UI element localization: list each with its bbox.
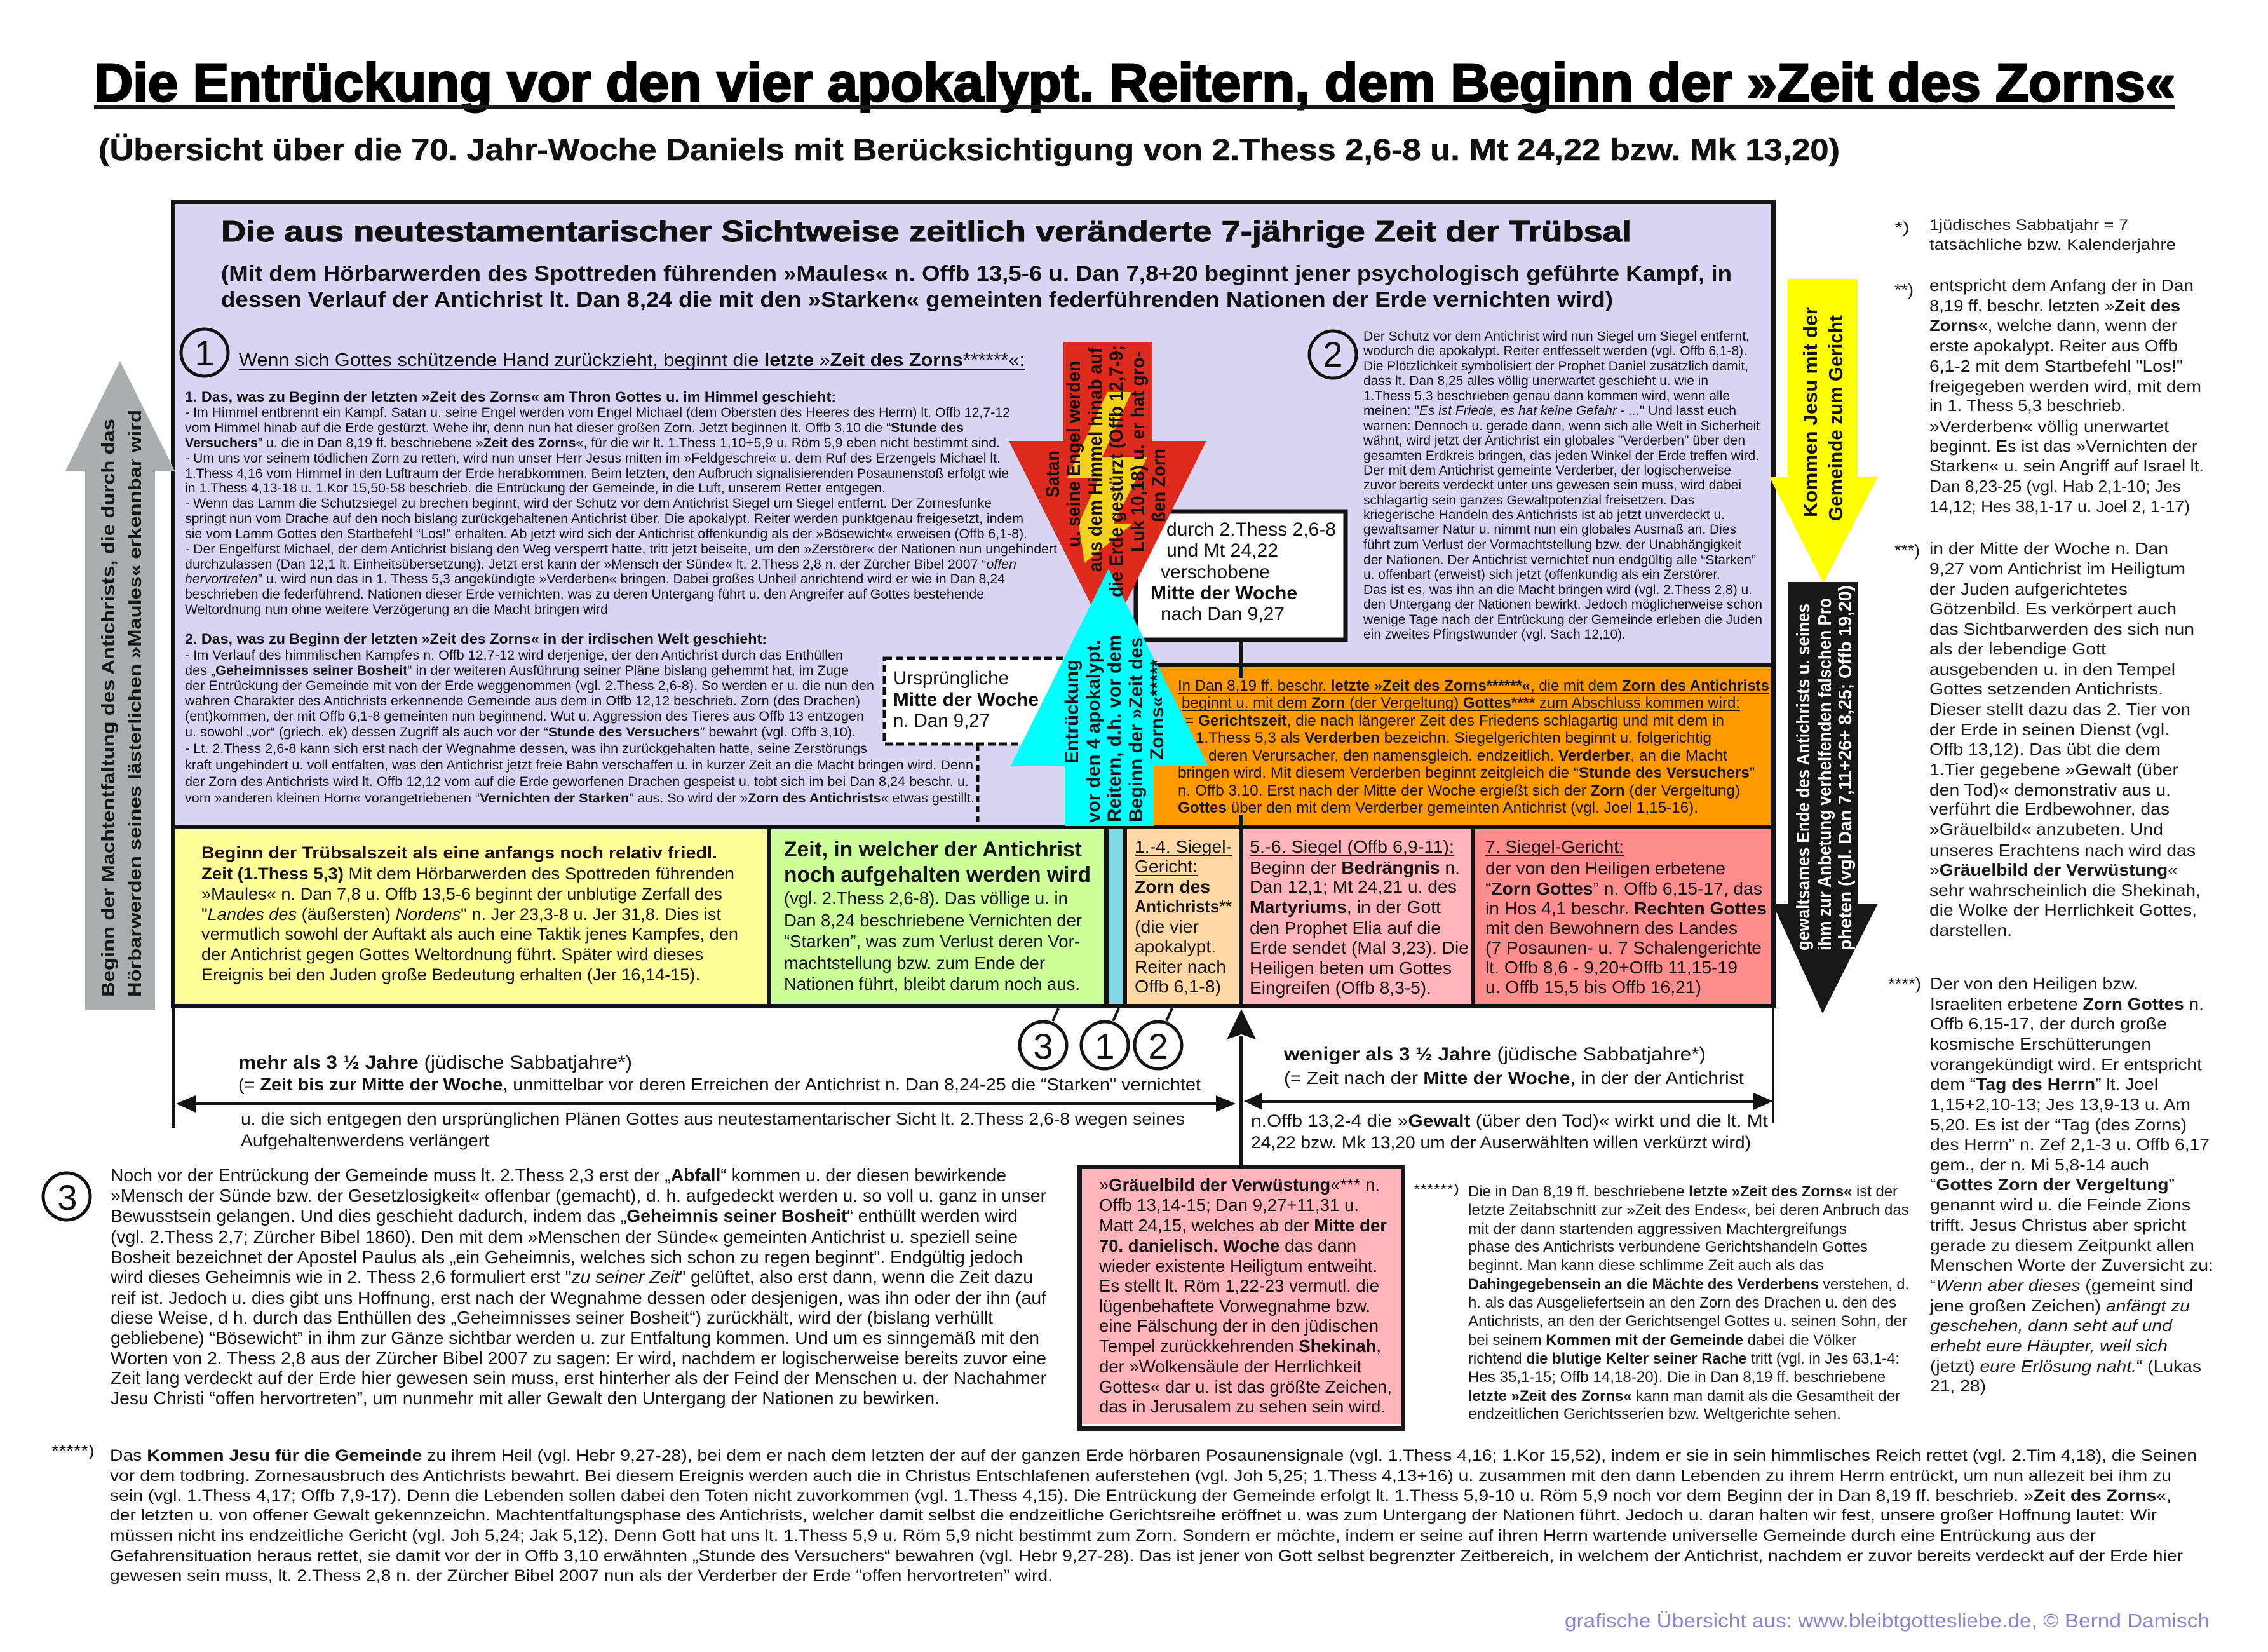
text block: section 1 heaven <box>185 389 1057 617</box>
footnote: five asterisks: Gefahrensituation heraus rettet, sie damit vor der in Offb 3,10 erwähnten „Stunde des Versuchers“ bewahren (vgl. Hebr 9,27-28). Das ist jener von Gott selbst begrenzter Zeitbereich, in welchem der Antichrist, nachdem er zuvor bereits verdeckt auf der Erde hier <box>110 1547 2183 1565</box>
text block: section 1 heaven: durchzulassen (Dan 12,1 lt. Einheitsübersetzung). Jetzt erst kann der »Mensch der Sünde« lt. 2.Thess 2,8 n. der Zürcher Bibel 2007 “ offen <box>185 557 1016 572</box>
footnote: five asterisks: müssen nicht ins endzeitliche Gericht (vgl. Joh 5,24; Jak 5,12). Denn Gott hat uns lt. 1.Thess 5,9 u. Röm 5,9 nicht bestimmt zum Zorn. Sondern er möchte, indem er seine auf ihren Herrn wartende universelle Gemeinde durch eine Entrückung aus der <box>110 1527 2096 1545</box>
text block: protection removed seal by seal: wodurch die apokalypt. Reiter entfesselt werden (vgl. Offb 6,1-8). <box>1363 344 1747 358</box>
footnote: three asterisks: 9,27 vom Antichrist im Heiligtum <box>1929 559 2185 578</box>
arrow: red downward Satan arrow with lightning bolt <box>1009 342 1206 639</box>
panel: abomination of desolation: »Gräuelbild der Verwüstung«*** n. <box>1099 1175 1380 1195</box>
footnote: four asterisks: gem., der n. Mi 5,8-14 auch <box>1930 1155 2149 1174</box>
panel: abomination of desolation: der »Wolkensäule der Herrlichkeit <box>1099 1357 1361 1376</box>
footnote: three asterisks: als der lebendige Gott <box>1929 639 2107 658</box>
text block: section 2 earth: (ent)kommen, der mit Offb 6,1-8 gemeinten nun beginnend. Wut u. Aggression des Tieres aus Offb 13 entzogen <box>185 709 864 724</box>
callout: original middle of the week: Mitte der Woche <box>893 689 1039 710</box>
panel: peach seals 1-4: 1.-4. Siegel- <box>1135 837 1232 856</box>
panel: abomination of desolation: eine Fälschung der in den jüdischen <box>1099 1316 1379 1336</box>
panel: pink seals 5-6: Eingreifen (Offb 8,3-5). <box>1250 978 1431 998</box>
panel: pink seals 5-6: 5.-6. Siegel (Offb 6,9-11): <box>1250 837 1454 856</box>
icon: number 3 circle <box>43 1173 90 1220</box>
text block: section 2 earth: - Lt. 2.Thess 2,6-8 kann sich erst nach der Wegnahme dessen, was ihn zurückgehalten hatte, seine Zerstörungs <box>185 741 867 756</box>
text block: section 1 heaven: - Im Himmel entbrennt ein Kampf. Satan u. seine Engel werden vom Engel Michael (dem Obersten des Heeres des Herrn) lt. Offb 12,7-12 <box>185 405 1010 420</box>
footnote: three asterisks: die Wolke der Herrlichkeit Gottes, <box>1929 900 2197 919</box>
text block: section 1 heaven: - Wenn das Lamm die Schutzsiegel zu brechen beginnt, wird der Schutz vor dem Antichrist Siegel um Siegel entfernt. Der Zornesfunke <box>185 496 992 511</box>
footnote: four asterisks: geschehen, dann seht auf und <box>1930 1316 2173 1335</box>
text block: section 1 heaven: sie vom Lamm Gottes den Startbefehl “Los!” erhalten. Ab jetzt wird sich der Antichrist offenkundig als der »Bösewicht« erweisen (Offb 6,1-8). <box>185 527 1027 541</box>
callout: original middle of the week: Ursprüngliche <box>893 668 1009 689</box>
panel: salmon seventh seal <box>1475 829 1771 1004</box>
panel: pink seals 5-6: Martyriums, in der Gott <box>1250 897 1441 917</box>
text block: protection removed seal by seal: warnen: Dennoch u. gerade dann, wenn sich alle Welt in Sicherheit <box>1363 419 1760 433</box>
footnote: two asterisks <box>1894 276 2204 516</box>
text block: apostasy and man of sin: Bosheit bezeichnet der Apostel Paulus als „ein Geheimnis, welches sich schon zu regen beginnt". Endgültig jedoch <box>111 1247 1023 1267</box>
panel: abomination of desolation: Es stellt lt. Röm 1,22-23 vermutl. die <box>1099 1276 1379 1296</box>
timeline: less than 3 1/2 years: (= Zeit nach der Mitte der Woche , in der der Antichrist <box>1284 1068 1744 1088</box>
text block: section 2 earth: u. sowohl „vor“ (griech. ek) dessen Zugriff als auch vor der “ Stunde des Versuchers ” bewahrt (vgl. Offb 3,10). <box>185 725 856 740</box>
panel: abomination of desolation: 70. danielisch. Woche das dann <box>1099 1236 1356 1256</box>
arrow: gray upward unfolding of power <box>65 361 175 1010</box>
text: red arrow label <box>1043 345 1170 597</box>
footnote: five asterisks: sein (vgl. 1.Thess 4,17; Offb 7,9-17). Denn die Lebenden sollen dabei den Toten nicht zuvorkommen (vgl. 1.Thess 4,15). Die Entrückung der Gemeinde erfolgt lt. 1.Thess 5,9-10 u. Röm 5,9 noch vor dem Beginn der in Dan 8,19 ff. beschrieb. » Zeit des Zorns «, <box>110 1487 2171 1505</box>
panel: salmon seventh seal: in Hos 4,1 beschr. Rechten Gottes <box>1485 898 1767 918</box>
panel: peach seals 1-4: Antichrists** <box>1135 897 1232 916</box>
footnote: two asterisks: **) <box>1894 280 1914 299</box>
text block: protection removed seal by seal: Das ist es, was ihn an die Macht bringen wird (vgl. 2.Thess 2,8) u. <box>1363 583 1752 597</box>
footnote: three asterisks: in der Mitte der Woche n. Dan <box>1929 539 2168 558</box>
footnote: one asterisk: tatsächliche bzw. Kalenderjahre <box>1929 236 2176 254</box>
panel: peach seals 1-4: Offb 6,1-8) <box>1135 977 1221 996</box>
text: red arrow label: u. seine Engel werden <box>1063 361 1084 547</box>
footnote: three asterisks: ausgebenden u. in den Tempel <box>1929 660 2175 679</box>
panel: green restrained Antichrist: Dan 8,24 beschriebene Vernichten der <box>784 911 1082 930</box>
panel: yellow beginning of tribulation: der Antichrist gegen Gottes Weltordnung führt. Später wird dieses <box>201 945 703 964</box>
footnote: three asterisks: »Gräuelbild« anzubeten. Und <box>1929 820 2163 839</box>
panel: green restrained Antichrist: (vgl. 2.Thess 2,6-8). Das völlige u. in <box>784 888 1068 908</box>
footnote: three asterisks: den Tod)« demonstrativ aus u. <box>1929 780 2171 799</box>
footnote: four asterisks <box>1888 974 2213 1395</box>
panel: green restrained Antichrist: Zeit, in welcher der Antichrist <box>784 837 1082 862</box>
panel: peach seals 1-4: Reiter nach <box>1135 957 1226 977</box>
arrow: yellow downward coming of Jesus: Gemeinde zum Gericht <box>1825 315 1847 521</box>
footnote: four asterisks: Menschen Worte der Zuversicht zu: <box>1930 1256 2213 1275</box>
footnote: four asterisks: 1,15+2,10-13; Jes 13,9-13 u. Am <box>1930 1095 2190 1114</box>
text block: protection removed seal by seal: meinen: "Es ist Friede, es hat keine Gefahr - ..." Und lasst euch <box>1363 403 1736 418</box>
footnote: four asterisks: Der von den Heiligen bzw. <box>1930 974 2138 993</box>
footnote: six asterisks: bei seinem Kommen mit der Gemeinde dabei die Völker <box>1468 1332 1856 1349</box>
text block: protection removed seal by seal: schlagartig sein ganzes Gewaltpotenzial freisetzen. Das <box>1363 493 1694 508</box>
panel: yellow beginning of tribulation: Ereignis bei den Juden große Bedeutung erhalten (Jer 16,14-15). <box>201 965 700 984</box>
text block: protection removed seal by seal: wenige Tage nach der Entrückung der Gemeinde erleben die Juden <box>1363 613 1762 627</box>
arrow: gray upward unfolding of power: Beginn der Machtentfaltung des Antichrists, die durch das <box>98 419 119 997</box>
text block: protection removed seal by seal: Der Schutz vor dem Antichrist wird nun Siegel um Siegel entfernt, <box>1363 329 1750 344</box>
panel: pink seals 5-6: Heiligen beten um Gottes <box>1250 958 1452 978</box>
text block: section 1 heaven: in 1.Thess 4,13-18 u. 1.Kor 15,50-58 beschrieb. die Entrückung der Gemeinde, in die Luft, unserem Retter entgegen. <box>185 481 886 496</box>
text block: apostasy and man of sin: Noch vor der Entrückung der Gemeinde muss lt. 2.Thess 2,3 erst der „ Abfall“ kommen u. der diesen bewirkende <box>111 1165 1006 1185</box>
callout: postponed middle of the week: Mitte der Woche <box>1151 583 1297 604</box>
footnote: one asterisk: 1jüdisches Sabbatjahr = 7 <box>1929 217 2128 234</box>
footnote: two asterisks: in 1. Thess 5,3 beschrieb. <box>1929 396 2126 415</box>
text block: protection removed seal by seal: der Nationen. Der Antichrist vernichtet nun endgültig alle “Starken” <box>1363 553 1756 567</box>
timeline: less than 3 1/2 years: weniger als 3 ½ Jahre (jüdische Sabbatjahre*) <box>1283 1044 1706 1065</box>
title: Die Entrückung vor den vier apokalypt. Reitern, dem Beginn der »Zeit des Zorns« <box>94 53 2175 112</box>
panel heading: Die aus neutestamentarischer Sichtweise zeitlich veränderte 7-jährige Zeit der Trübsal <box>221 215 1631 248</box>
text: cyan arrow label: vor den 4 apokalypt. <box>1083 640 1104 823</box>
text block: section 2 earth: vom »anderen kleinen Horn« vorangetriebenen “ Vernichten der Starken ” aus. So wird der »Zorn des Antichrists « etwas gestillt. <box>185 791 975 806</box>
footnote: five asterisks: gewesen sein muss, lt. 2.Thess 2,8 n. der Zürcher Bibel 2007 nun als der Verderber der Erde “offen hervortreten” wird. <box>110 1567 1053 1585</box>
text block: section 2 earth: - Im Verlauf des himmlischen Kampfes n. Offb 12,7-12 wird derjenige, der den Antichrist durch das Enthüllen <box>185 648 843 663</box>
panel: peach seals 1-4: apokalypt. <box>1135 937 1216 956</box>
panel: yellow beginning of tribulation: »Maules« n. Dan 7,8 u. Offb 13,5-6 beginnt der unblutige Zerfall des <box>201 884 722 904</box>
timeline: less than 3 1/2 years: 24,22 bzw. Mk 13,20 um der Auserwählten willen verkürzt wird) <box>1251 1133 1751 1152</box>
text: cyan arrow label: Entrückung <box>1062 660 1083 764</box>
icon: circles 3 1 2 with leaders: 1 <box>1095 1026 1115 1066</box>
credit line: grafische Übersicht aus: www.bleibtgottesliebe.de, © Bernd Damisch <box>1565 1609 2210 1632</box>
text block: protection removed seal by seal: führt zum Verlust der Vormachtstellung bzw. der Unabhängigkeit <box>1363 538 1741 552</box>
text block: protection removed seal by seal: wähnt, wird jetzt der Antichrist ein globales "Verderben" über den <box>1363 433 1745 448</box>
footnote: six asterisks: h. als das Ausgeliefertsein an den Zorn des Drachen u. den des <box>1468 1294 1896 1311</box>
footnote: four asterisks: ****) <box>1888 974 1921 993</box>
footnote: three asterisks: Götzenbild. Es verkörpert auch <box>1929 599 2177 618</box>
footnote: six asterisks: letzte »Zeit des Zorns« kann man damit als die Gesamtheit der <box>1468 1388 1900 1405</box>
panel: yellow beginning of tribulation: "Landes des (äußersten) Nordens" n. Jer 23,3-8 u. Jer 31,8. Dies ist <box>201 905 721 924</box>
footnote: one asterisk <box>1894 217 2176 254</box>
panel: peach seals 1-4 <box>1127 829 1239 1004</box>
footnote: two asterisks: Dan 8,23-25 (vgl. Hab 2,1-10; Jes <box>1929 477 2181 496</box>
footnote: six asterisks: richtend die blutige Kelter seiner Rache tritt (vgl. in Jes 63,1-4: <box>1468 1350 1900 1367</box>
footnote: four asterisks: kosmische Erschütterungen <box>1930 1034 2151 1053</box>
footnote: four asterisks: Offb 6,15-17, der durch große <box>1930 1014 2167 1033</box>
panel: abomination of desolation: Gottes« dar u. ist das größte Zeichen, <box>1099 1377 1392 1397</box>
panel heading: dessen Verlauf der Antichrist lt. Dan 8,24 die mit den »Starken« gemeinten federführenden Nationen der Erde vernichten wird) <box>221 288 1613 312</box>
footnote: five asterisks <box>51 1442 2197 1585</box>
footnote: four asterisks: 5,20. Es ist der “Tag (des Zorns) <box>1930 1115 2187 1134</box>
panel: abomination of desolation: Offb 13,14-15; Dan 9,27+11,31 u. <box>1099 1195 1359 1215</box>
footnote: two asterisks: 6,1-2 mit dem Startbefehl "Los!" <box>1929 356 2183 376</box>
panel: orange judgment time <box>1112 663 1771 826</box>
text block: apostasy and man of sin: Zeit lang verdeckt auf der Erde hier gewesen sein muss, erst hinterher als der Feind der Menschen u. der Nachahmer <box>111 1368 1046 1388</box>
text: cyan arrow label: Zorns«***** <box>1147 660 1168 760</box>
text block: apostasy and man of sin: gebliebene) “Bösewicht” in ihm zur Gänze sichtbar werden u. zur Entfaltung kommen. Und um es sinngemäß mit den <box>111 1328 1039 1348</box>
footnote: two asterisks: 14,12; Hes 38,1-17 u. Joel 2, 1-17) <box>1929 497 2190 516</box>
footnote: four asterisks: des Herrn” n. Zef 2,1-3 u. Offb 6,17 <box>1930 1135 2210 1154</box>
timeline: more than 3 1/2 years <box>172 1008 1236 1150</box>
text block: protection removed seal by seal: Der mit dem Antichrist gemeinte Verderber, der logischerweise <box>1363 463 1731 478</box>
footnote: three asterisks: Dieser stellt dazu das 2. Tier von <box>1929 700 2190 719</box>
panel: teal strip <box>1109 829 1123 1004</box>
text: red arrow label: Satan <box>1043 450 1063 498</box>
arrow: black downward end of Antichrist: gewaltsames Ende des Antichrists u. seines <box>1793 604 1814 951</box>
panel: orange judgment time: In Dan 8,19 ff. beschr. letzte »Zeit des Zorns******«, die mit dem Zorn des Antichrists <box>1178 677 1769 694</box>
text block: apostasy and man of sin: (vgl. 2.Thess 2,7; Zürcher Bibel 1860). Den mit dem »Menschen der Sünde« gemeinten Antichrist u. speziell seine <box>111 1227 1018 1247</box>
footnote: four asterisks: 21, 28) <box>1930 1376 1986 1395</box>
panel: abomination of desolation: Tempel zurückkehrenden Shekinah, <box>1099 1336 1381 1356</box>
footnote: four asterisks: trifft. Jesus Christus aber spricht <box>1930 1215 2187 1235</box>
footnote: one asterisk: *) <box>1894 219 1910 236</box>
footnote: three asterisks <box>1894 539 2201 940</box>
heading: when God's protection withdraws: Wenn sich Gottes schützende Hand zurückzieht, beginnt die letzte »Zeit des Zorns ******«: <box>239 350 1025 370</box>
panel: green restrained Antichrist: Nationen führt, bleibt darum noch aus. <box>784 974 1080 994</box>
text block: protection removed seal by seal: gesamten Erdkreis bringen, das jeden Winkel der Erde treffen wird. <box>1363 449 1759 463</box>
footnote: four asterisks: “Gottes Zorn der Vergeltung ” <box>1930 1175 2175 1194</box>
footnote: six asterisks: letzte Zeitabschnitt zur »Zeit des Endes«, bei deren Anbruch das <box>1468 1202 1909 1219</box>
footnote: four asterisks: genannt wird u. die Feinde Zions <box>1930 1195 2190 1214</box>
text block: section 2 earth: der Zorn des Antichrists wird lt. Offb 12,12 vom auf die Erde geworfenen Drachen gespeist u. tobt sich im bei Dan 8,24 beschr. u. <box>185 775 969 789</box>
arrow: cyan upward rapture arrow <box>1011 569 1208 826</box>
footnote: three asterisks: sehr wahrscheinlich die Shekinah, <box>1929 881 2201 900</box>
text block: apostasy and man of sin: Worten von 2. Thess 2,8 aus der Zürcher Bibel 2007 zu sagen: Er wird, nachdem er logischerweise bereits zuvor eine <box>111 1348 1046 1368</box>
timeline: more than 3 1/2 years: (= Zeit bis zur Mitte der Woche , unmittelbar vor deren Erreichen der Antichrist n. Dan 8,24-25 die “Starken" vernichtet <box>238 1074 1201 1094</box>
footnote: four asterisks: dem “Tag des Herrn ” lt. Joel <box>1930 1074 2158 1093</box>
panel: orange judgment time: Gottes über den mit dem Verderber gemeinten Antichrist (vgl. Joel 1,15-16). <box>1178 799 1698 816</box>
footnote: four asterisks: erhebt eure Häupter, weil sich <box>1930 1336 2168 1355</box>
footnote: six asterisks: beginnt. Man kann diese schlimme Zeit auch als das <box>1468 1257 1824 1274</box>
footnote: three asterisks: das Sichtbarwerden des sich nun <box>1929 620 2194 639</box>
icon: circles 3 1 2 with leaders: 3 <box>1033 1026 1053 1066</box>
text block: section 1 heaven: - Um uns vor seinem tödlichen Zorn zu retten, wird nun unser Herr Jesus mitten im »Feldgeschrei« u. dem Ruf des Erzengels Michael lt. <box>185 451 1001 466</box>
panel heading <box>221 215 1732 312</box>
footnote: four asterisks: gerade zu diesem Zeitpunkt allen <box>1930 1236 2194 1255</box>
icon: number 1 circle: 1 <box>194 333 215 373</box>
timeline: less than 3 1/2 years <box>1244 1008 1774 1152</box>
text block: section 1 heaven: vom Himmel hinab auf die Erde gestürzt. Wehe ihr, denn nun hat dieser großen Zorn. Jetzt beginnen lt. Offb 3,10 die “ Stunde des <box>185 421 964 435</box>
text block: section 1 heaven: 1. Das, was zu Beginn der letzten »Zeit des Zorns« am Thron Gottes u. im Himmel geschieht: <box>185 389 836 405</box>
text block: protection removed seal by seal: u. offenbart (erweist) sich jetzt (offenkundig als ein Zerstörer. <box>1363 567 1720 582</box>
callout: postponed middle of the week: durch 2.Thess 2,6-8 <box>1166 519 1336 540</box>
arrow: black downward end of Antichrist <box>1772 582 1878 1013</box>
panel: yellow beginning of tribulation: Beginn der Trübsalszeit als eine anfangs noch relativ friedl. <box>201 843 717 862</box>
footnote: five asterisks: *****) <box>51 1442 95 1460</box>
footnote: six asterisks: Die in Dan 8,19 ff. beschriebene letzte »Zeit des Zorns« ist der <box>1468 1183 1898 1200</box>
panel: salmon seventh seal: der von den Heiligen erbetene <box>1485 858 1725 878</box>
panel: abomination of desolation <box>1077 1165 1405 1431</box>
panel: salmon seventh seal: u. Offb 15,5 bis Offb 16,21) <box>1485 977 1701 997</box>
footnote: two asterisks: entspricht dem Anfang der in Dan <box>1929 276 2194 295</box>
icon: number 1 circle <box>181 329 228 376</box>
callout: postponed middle of the week: und Mt 24,22 <box>1166 540 1278 561</box>
panel: orange judgment time: 1.Thess 5,3 als Verderben bezeichn. Siegelgerichten beginnt u. folgerichtig <box>1196 729 1711 747</box>
text block: apostasy and man of sin: diese Weise, d h. durch das Enthüllen des „Geheimnisses seiner Bosheit“) zurückhält, wird der (bislang verhüllt <box>111 1308 993 1327</box>
icon: number 3 circle: 3 <box>57 1177 78 1217</box>
footnote: three asterisks: verführt die Erdbewohner, das <box>1929 799 2170 818</box>
text block: section 1 heaven: - Der Engelfürst Michael, der dem Antichrist bislang den Weg versperrt hatte, tritt jetzt beiseite, um den »Zerstörer« der Nationen nun ungehindert <box>185 542 1057 557</box>
footnote: four asterisks: vorangekündigt wird. Er entspricht <box>1930 1055 2203 1074</box>
footnote: two asterisks: »Verderben« völlig unerwartet <box>1929 417 2170 436</box>
text block: section 1 heaven: Versuchers” u. die in Dan 8,19 ff. beschriebene »Zeit des Zorns«, für die wir lt. 1.Thess 1,10+5,9 u. Röm 5,9 eben nicht bestimmt sind. <box>185 436 1000 450</box>
footnote: two asterisks: beginnt. Es ist das »Vernichten der <box>1929 437 2197 456</box>
arrow: yellow downward coming of Jesus: Kommen Jesu mit der <box>1799 307 1821 517</box>
text block: protection removed seal by seal: dass lt. Dan 8,25 alles völlig unerwartet geschieht u. wie in <box>1363 374 1708 388</box>
footnote: three asterisks: unseres Erachtens nach wird das <box>1929 841 2196 860</box>
panel: pink seals 5-6: den Prophet Elia auf die <box>1250 918 1441 938</box>
arrow: yellow downward coming of Jesus <box>1769 279 1878 583</box>
footnote: six asterisks: endzeitlichen Gerichtsserien bzw. Weltgerichte sehen. <box>1468 1405 1841 1423</box>
footnote: three asterisks: Gottes setzenden Antichrists. <box>1929 679 2163 698</box>
text block: apostasy and man of sin: »Mensch der Sünde bzw. der Gesetzlosigkeit« offenbar (gemacht), d. h. aufgedeckt werden u. so voll u. ganz in unser <box>111 1186 1046 1205</box>
footnote: two asterisks: freigegeben werden wird, mit dem <box>1929 377 2201 396</box>
footnote: six asterisks: phase des Antichrists verbundene Gerichtshandeln Gottes <box>1468 1238 1868 1256</box>
text block: section 2 earth <box>184 631 975 806</box>
panel: salmon seventh seal: mit den Bewohnern des Landes <box>1485 918 1738 938</box>
text block: apostasy and man of sin: Bewusstsein gelangen. Und dies geschieht dadurch, indem das „ Geheimnis seiner Bosheit“ enthüllt werden wird <box>111 1206 1018 1226</box>
panel: yellow beginning of tribulation: vermutlich sowohl der Auftakt als auch eine Taktik jenes Kampfes, den <box>201 924 738 944</box>
callout: original middle of the week <box>884 658 1069 825</box>
footnote: six asterisks: Antichrists, an den der Gerichtsengel Gottes u. seinen Sohn, der <box>1468 1313 1907 1330</box>
footnote: six asterisks: Dahingegebensein an die Mächte des Verderbens verstehen, d. <box>1468 1276 1909 1293</box>
text block: protection removed seal by seal: 1.Thess 5,3 beschrieben genau dann kommen wird, wenn alle <box>1363 389 1730 403</box>
arrow: black downward end of Antichrist: pheten (vgl. Dan 7,11+26+ 8,25; Offb 19,20) <box>1835 585 1856 951</box>
footnote: five asterisks: der letzten u. von offener Gewalt gekennzeichn. Machtentfaltungsphase des Antichrists, welcher damit selbst die endzeitliche Gerichtsreihe eröffnet u. was zum Untergang der Nationen führt. Jedoch u. daran halten wir fest, unsere großer Hoffnung lautet: Wir <box>110 1506 2157 1524</box>
text block: section 2 earth: wahren Charakter des Antichrists erkennende Gemeinde aus dem in Offb 12,12 beschrieb. Zorn (des Drachen) <box>184 694 860 708</box>
footnote: six asterisks: Hes 35,1-15; Offb 14,18-20). Die in Dan 8,19 ff. beschriebene <box>1468 1369 1886 1386</box>
footnote: five asterisks: vor dem todbring. Zornesausbruch des Antichrists bewahrt. Bei diesem Ereignis werden auch die in Christus Entschlafenen auferstehen (vgl. Joh 5,25; 1.Thess 4,13+16) u. zusammen mit den dann Lebenden zu ihrem Herrn entrückt, um nun allezeit bei ihm zu <box>110 1467 2171 1485</box>
text: cyan arrow label: Reitern, d.h. vor dem <box>1104 635 1125 822</box>
panel: pink seals 5-6: Dan 12,1; Mt 24,21 u. des <box>1250 877 1457 897</box>
footnote: two asterisks: Zorns«, welche dann, wenn der <box>1929 316 2177 335</box>
timeline: more than 3 1/2 years: u. die sich entgegen den ursprünglichen Plänen Gottes aus neutestamentarischer Sicht lt. 2.Thess 2,6-8 wegen seines <box>241 1109 1185 1128</box>
panel: orange judgment time: n. Offb 3,10. Erst nach der Mitte der Woche ergießt sich der Zorn (der Vergeltung) <box>1178 782 1740 799</box>
text block: protection removed seal by seal: kriegerische Handeln des Antichrists ist ab jetzt unverdeckt u. <box>1363 508 1725 522</box>
text block: section 2 earth: des „Geheimnisses seiner Bosheit “ in der weiteren Ausführung seiner Pläne bislang gehemmt hat, im Zuge <box>185 663 849 678</box>
text: cyan arrow label <box>1062 635 1168 823</box>
timeline: less than 3 1/2 years: n.Offb 13,2-4 die » Gewalt (über den Tod)« wirkt und die lt. Mt <box>1251 1111 1769 1130</box>
panel: peach seals 1-4: (die vier <box>1135 917 1199 937</box>
panel: abomination of desolation: lügenbehaftete Vorwegnahme bzw. <box>1099 1296 1370 1316</box>
footnote: six asterisks <box>1414 1182 1909 1423</box>
footnote: three asterisks: ***) <box>1894 541 1920 560</box>
text block: protection removed seal by seal: den Untergang der Nationen bewirkt. Jedoch möglicherweise schon <box>1363 597 1762 612</box>
callout: postponed middle of the week <box>1136 511 1346 678</box>
text: red arrow label: Luk 10,18) u. er hat gro- <box>1128 351 1149 552</box>
icon: number 2 circle <box>1309 331 1356 378</box>
text block: section 1 heaven: Weltordnung nun ohne weitere Verzögerung an die Macht bringen wird <box>185 602 608 617</box>
panel: salmon seventh seal: 7. Siegel-Gericht: <box>1485 837 1624 856</box>
arrow: black downward end of Antichrist: ihm zur Anbetung verhelfenden falschen Pro <box>1815 598 1835 951</box>
panel: pink seals 5-6 <box>1243 829 1471 1004</box>
callout: postponed middle of the week: nach Dan 9,27 <box>1161 604 1285 625</box>
panel: peach seals 1-4: Zorn des <box>1135 877 1210 897</box>
footnote: three asterisks: »Gräuelbild der Verwüstung « <box>1929 860 2178 879</box>
icon: circles 3 1 2 with leaders: 2 <box>1148 1026 1168 1066</box>
text block: section 2 earth: kraft ungehindert u. voll entfalten, was den Antichrist jetzt freie Bahn verschaffen u. in kurzer Zeit an die Macht bringen wird. Denn <box>185 758 973 773</box>
text block: apostasy and man of sin <box>110 1165 1046 1408</box>
text block: protection removed seal by seal: zuvor bereits verdeckt unter uns gewesen sein muss, wird dabei <box>1363 478 1741 492</box>
footnote: three asterisks: Offb 13,12). Das übt die dem <box>1929 740 2161 759</box>
panel: green restrained Antichrist: machtstellung bzw. zum Ende der <box>784 953 1045 973</box>
text: cyan arrow label: Beginn der »Zeit des <box>1126 637 1147 822</box>
panel: salmon seventh seal: (7 Posaunen- u. 7 Schalengerichte <box>1485 938 1762 958</box>
callout: original middle of the week: n. Dan 9,27 <box>893 710 990 731</box>
arrow: gray upward unfolding of power: Hörbarwerden seines lästerlichen »Maules« erkennbar wird <box>125 410 145 997</box>
panel: peach seals 1-4: Gericht: <box>1135 856 1198 876</box>
footnote: four asterisks: Israeliten erbetene Zorn Gottes n. <box>1930 994 2204 1013</box>
text block: protection removed seal by seal: gewaltsamer Natur u. nimmt nun ein globales Ausmaß an. Dies <box>1363 522 1736 537</box>
subtitle: (Übersicht über die 70. Jahr-Woche Daniels mit Berücksichtigung von 2.Thess 2,6-8 u. Mt 24,22 bzw. Mk 13,20) <box>98 133 1840 167</box>
text block: apostasy and man of sin: reif ist. Jedoch u. dies gibt uns Hoffnung, erst nach der Wegnahme dessen oder desjenigen, was ihn oder der ihn (auf <box>111 1288 1046 1308</box>
panel: orange judgment time: = Gerichtszeit, die nach längerer Zeit des Friedens schlagartig und mit dem in <box>1185 712 1724 729</box>
text: red arrow label: die Erde gestürzt (Offb 12,7-9; <box>1106 345 1127 597</box>
text block: section 1 heaven: 1.Thess 4,16 vom Himmel in den Luftraum der Erde herabkommen. Beim letzten, den Aufbruch signalisierenden Posaunenstoß erfolgt wie <box>185 466 1009 481</box>
text: red arrow label: ßen Zorn <box>1149 449 1170 522</box>
panel: abomination of desolation: wieder existente Heiligtum entweiht. <box>1098 1256 1377 1276</box>
panel: abomination of desolation: Matt 24,15, welches ab der Mitte der <box>1099 1215 1387 1235</box>
text block: section 2 earth: der Entrückung der Gemeinde mit von der Erde weggenommen (vgl. 2.Thess 2,6-8). So werden er u. die nun den <box>185 679 874 693</box>
footnote: four asterisks: “Wenn aber dieses (gemeint sind <box>1930 1276 2193 1295</box>
text block: apostasy and man of sin: wird dieses Geheimnis wie in 2. Thess 2,6 formuliert erst "zu seiner Zeit" gelüftet, also erst dann, wenn die Zeit dazu <box>110 1267 1033 1287</box>
footnote: three asterisks: der Erde in seinen Dienst (vgl. <box>1929 720 2170 739</box>
callout: postponed middle of the week: verschobene <box>1161 562 1270 583</box>
text block: section 2 earth: 2. Das, was zu Beginn der letzten »Zeit des Zorns« in der irdischen Welt geschieht: <box>185 631 767 647</box>
footnote: three asterisks: 1.Tier gegebene »Gewalt (über <box>1929 760 2178 779</box>
text block: protection removed seal by seal: ein zweites Pfingstwunder (vgl. Sach 12,10). <box>1363 627 1626 642</box>
panel: salmon seventh seal: lt. Offb 8,6 - 9,20+Offb 11,15-19 <box>1485 958 1738 977</box>
footnote: two asterisks: Starken« u. sein Angriff auf Israel lt. <box>1929 456 2204 475</box>
arrow: central upward arrow middle of the week <box>1227 1009 1256 1165</box>
footnote: four asterisks: jene großen Zeichen) anfängt zu <box>1929 1296 2190 1315</box>
footnote: three asterisks: darstellen. <box>1929 921 2012 940</box>
panel: orange judgment time: bringen wird. Mit diesem Verderben beginnt zeitgleich die “ Stunde des Versuchers” <box>1178 764 1755 782</box>
text block: section 1 heaven: beschrieben die federführend. Nationen dieser Erde vernichten, was zu deren Untergang führt u. den Angreifer auf Gottes bestehende <box>185 587 984 602</box>
text block: protection removed seal by seal: Die Plötzlichkeit symbolisiert der Prophet Daniel zusätzlich damit, <box>1363 359 1748 374</box>
footnote: five asterisks: Das Kommen Jesu für die Gemeinde zu ihrem Heil (vgl. Hebr 9,27-28), bei dem er nach dem letzten der auf der ganzen Erde hörbaren Posaunensignale (vgl. 1.Thess 4,16; 1.Kor 15,52), indem er sie in sein himmlisches Reich rettet (vgl. 2.Tim 4,18), die Seinen <box>110 1447 2197 1465</box>
footnote: four asterisks: (jetzt) eure Erlösung naht. “ (Lukas <box>1930 1357 2201 1376</box>
panel: pink seals 5-6: Beginn der Bedrängnis n. <box>1250 858 1460 877</box>
text block: section 1 heaven: springt nun vom Drache auf den noch bislang zurückgehaltenen Antichrist über. Die apokalypt. Reiter werden punktgenau freigesetzt, indem <box>185 511 1023 526</box>
footnote: two asterisks: 8,19 ff. beschr. letzten » Zeit des <box>1929 296 2180 315</box>
text block: protection removed seal by seal <box>1363 329 1762 642</box>
panel: salmon seventh seal: “Zorn Gottes” n. Offb 6,15-17, das <box>1485 879 1762 898</box>
panel: green restrained Antichrist <box>771 829 1104 1004</box>
panel: orange judgment time: deren Verursacher, den namensgleich. endzeitlich. Verderber, an die Macht <box>1208 747 1727 764</box>
panel: yellow beginning of tribulation <box>175 829 767 1004</box>
footnote: two asterisks: erste apokalypt. Reiter aus Offb <box>1929 336 2178 355</box>
panel: green restrained Antichrist: “Starken”, was zum Verlust deren Vor- <box>784 931 1080 951</box>
panel: green restrained Antichrist: noch aufgehalten werden wird <box>784 863 1091 887</box>
icon: circles 3 1 2 with leaders <box>1020 1008 1182 1069</box>
icon: number 2 circle: 2 <box>1323 334 1343 374</box>
panel: yellow beginning of tribulation: Zeit (1.Thess 5,3) Mit dem Hörbarwerden des Spottreden führenden <box>201 864 734 883</box>
timeline: more than 3 1/2 years: mehr als 3 ½ Jahre (jüdische Sabbatjahre*) <box>238 1052 632 1073</box>
footnote: six asterisks: ******) <box>1414 1182 1459 1196</box>
panel heading: (Mit dem Hörbarwerden des Spottreden führenden »Maules« n. Offb 13,5-6 u. Dan 7,8+20 beginnt jener psychologisch geführte Kampf, in <box>221 262 1732 286</box>
panel: orange judgment time: beginnt u. mit dem Zorn (der Vergeltung) Gottes**** zum Abschluss kommen wird: <box>1182 694 1740 712</box>
panel: pink seals 5-6: Erde sendet (Mal 3,23). Die <box>1250 938 1469 958</box>
timeline: more than 3 1/2 years: Aufgehaltenwerdens verlängert <box>241 1131 490 1150</box>
footnote: six asterisks: mit der dann startenden aggressiven Machtergreifungs <box>1468 1221 1847 1238</box>
footnote: three asterisks: der Juden aufgerichtetes <box>1929 579 2128 599</box>
text block: apostasy and man of sin: Jesu Christi “offen hervortreten”, um nunmehr mit aller Gewalt den Untergang der Nationen zu bewirken. <box>111 1388 940 1408</box>
text: red arrow label: aus dem Himmel hinab auf <box>1085 347 1106 572</box>
panel: abomination of desolation: das in Jerusalem zu sehen sein wird. <box>1099 1397 1386 1416</box>
text block: section 1 heaven: hervortreten” u. wird nun das in 1. Thess 5,3 angekündigte »Verderben« bringen. Dabei großes Unheil anrichtend wird er wie in Dan 8,24 <box>185 572 1005 586</box>
panel: frame of the seven-year period <box>171 200 1776 1008</box>
